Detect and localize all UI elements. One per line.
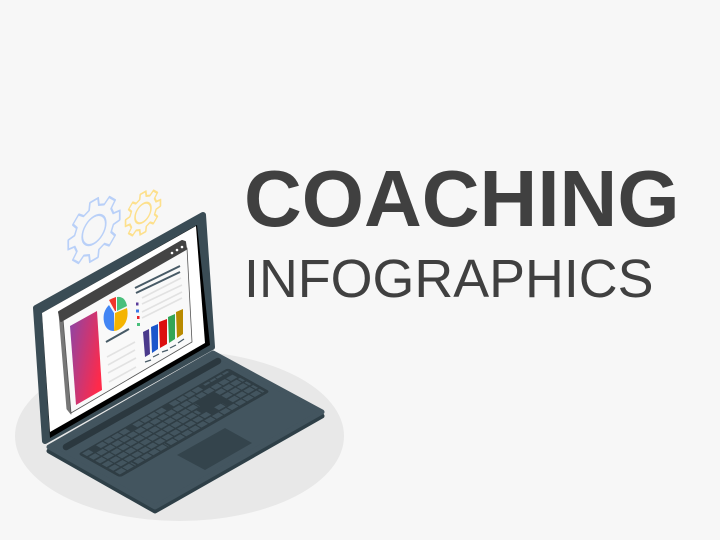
app window [59,241,192,414]
bar chart [143,309,184,362]
gradient sidebar [70,311,102,405]
key rows [84,371,263,473]
right column text lines [135,266,182,318]
screen white area [42,226,205,432]
icon: yellow gear [126,183,160,243]
bullets [136,302,140,326]
screen black edge [42,225,210,438]
pie chart [104,297,128,331]
left column text lines [106,329,136,382]
laptop lid bezel [36,215,212,441]
subtitle: INFOGRAPHICS: INFOGRAPHICS [244,249,654,309]
title: COACHING: COACHING [244,154,680,243]
window body [63,248,192,413]
laptop ground shadow [15,351,344,521]
laptop base top [49,353,322,507]
window side shadow [59,312,71,414]
window title bar [59,241,186,321]
laptop base side edge [49,357,322,511]
keyboard well [78,368,270,478]
keyboard [78,368,270,478]
window control dots [171,246,183,254]
laptop [36,215,322,511]
touchpad [177,428,252,470]
speaker strip [66,361,218,447]
icon: blue gear [68,186,120,274]
